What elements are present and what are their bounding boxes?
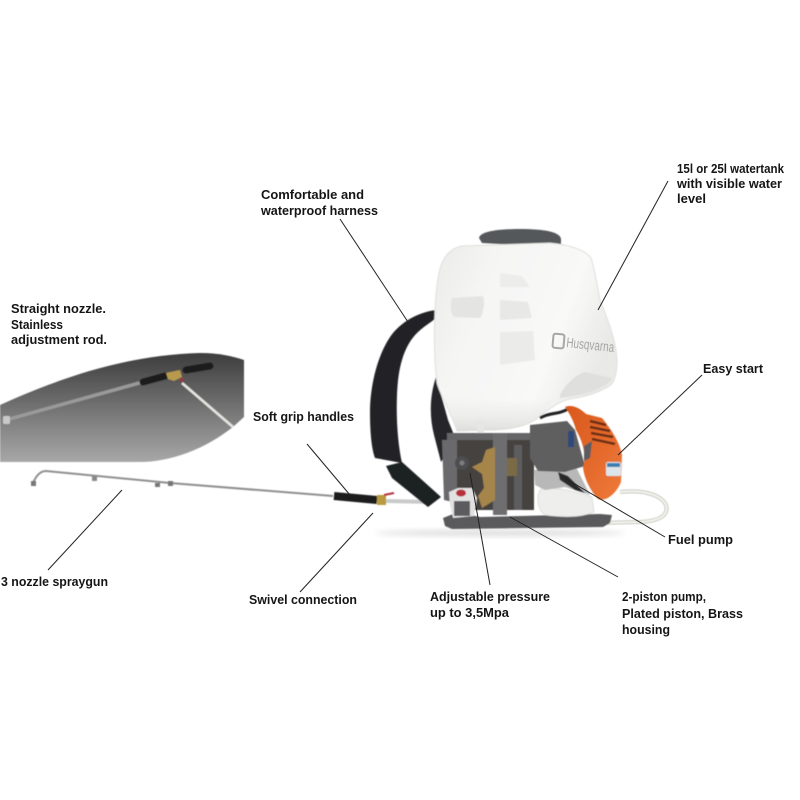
icon: rod collar [168, 481, 173, 486]
arrow: swivel [300, 513, 373, 592]
heading: straight nozzle label: Stainless [11, 318, 63, 332]
label: harness: Comfortable and [261, 188, 364, 202]
icon: frame top bar [447, 433, 531, 440]
icon: cover label strip [607, 463, 620, 467]
icon: tank outlet [477, 420, 484, 436]
icon: nozzle tip three [155, 483, 160, 487]
icon: front harness strap [370, 310, 436, 463]
icon: red valve part [180, 378, 184, 382]
icon: frame pillar right [514, 445, 522, 510]
icon: water tank [434, 243, 617, 431]
label: swivel: Swivel connection [249, 593, 357, 607]
icon: carburettor fins [558, 472, 585, 493]
icon: handle grip [334, 496, 377, 500]
icon: regulator red button [456, 490, 466, 496]
icon: hose loop [600, 491, 667, 523]
label: pressure: up to 3,5Mpa [430, 606, 510, 620]
icon: tank cap [479, 229, 561, 247]
icon: stainless adjustment rod [6, 382, 143, 420]
icon: nozzle tip two [92, 476, 97, 481]
icon: floor shadow [375, 530, 625, 536]
label: fuel pump: Fuel pump [668, 533, 733, 547]
icon: grip upper [186, 366, 210, 370]
icon: hose [386, 501, 432, 502]
icon: tank lower recess [560, 372, 612, 398]
icon: frame pillar [493, 433, 507, 515]
icon: engine mount [534, 465, 590, 495]
label: piston pump: 2-piston pump, [622, 590, 706, 604]
icon: engine housing [530, 421, 585, 472]
icon: tank rib two [500, 300, 532, 320]
arrow: soft grip [307, 444, 350, 495]
icon: white hose [182, 383, 233, 427]
label: spraygun: 3 nozzle spraygun [1, 575, 108, 589]
icon: rod tip [3, 416, 10, 424]
icon: tank rib three [500, 331, 535, 365]
icon: spray gun [31, 471, 432, 505]
arrow: harness [340, 219, 408, 322]
icon: pressure knob center [460, 460, 464, 466]
icon: tank base shading [437, 383, 560, 431]
label: soft grip: Soft grip handles [253, 410, 354, 424]
icon: cooling vents [590, 421, 615, 444]
icon: frame left plate [442, 440, 457, 503]
icon: tank side recess [451, 296, 484, 318]
panel: straight nozzle detail [0, 353, 244, 462]
arrow: piston pump [510, 517, 618, 577]
arrow: adjustable pressure [470, 473, 490, 585]
icon: base plate [443, 512, 612, 529]
label: piston pump: housing [622, 623, 670, 637]
label: piston pump: Plated piston, Brass [622, 607, 743, 621]
icon: Husqvarna logo [552, 334, 615, 355]
icon: rear strap [431, 377, 456, 462]
icon: hose loop highlight [600, 491, 667, 523]
icon: pressure regulator [449, 488, 477, 518]
icon: grey handle [584, 441, 592, 461]
text: brand name: Husqvarna [566, 334, 615, 355]
icon: cover label [606, 462, 621, 476]
icon: brass swivel [377, 495, 386, 505]
icon: valve lever [384, 493, 394, 495]
icon: brass pump body [472, 447, 495, 508]
label: watertank: level [677, 192, 706, 206]
icon: pressure knob [455, 456, 469, 470]
arrow: fuel pump [563, 477, 665, 537]
label: pressure: Adjustable pressure [430, 590, 550, 604]
label: watertank: with visible water [676, 177, 782, 191]
label: harness: waterproof harness [260, 204, 378, 218]
icon: sprayer [370, 229, 667, 529]
icon: grip lower [143, 376, 165, 382]
icon: logo shield [552, 334, 565, 348]
icon: brass housing right [507, 458, 517, 476]
arrow: easy start [618, 375, 702, 455]
icon: tank rib one [500, 273, 530, 287]
icon: brass valve [166, 370, 182, 381]
icon: engine window [568, 431, 574, 447]
arrow: spraygun [48, 490, 122, 570]
label: watertank: 15l or 25l watertank [677, 162, 784, 176]
icon: nozzle tip one [31, 481, 36, 486]
icon: regulator dark part [454, 501, 470, 516]
icon: frame inner [456, 440, 534, 510]
arrow: watertank [598, 181, 668, 310]
icon: fuel tank [538, 488, 594, 517]
icon: orange engine cover [565, 406, 622, 500]
heading: straight nozzle label: adjustment rod. [11, 333, 107, 347]
label: easy start: Easy start [703, 362, 764, 376]
heading: straight nozzle label: Straight nozzle. [11, 302, 106, 316]
icon: starter handle wire [540, 409, 568, 418]
icon: lower strap [386, 462, 441, 507]
